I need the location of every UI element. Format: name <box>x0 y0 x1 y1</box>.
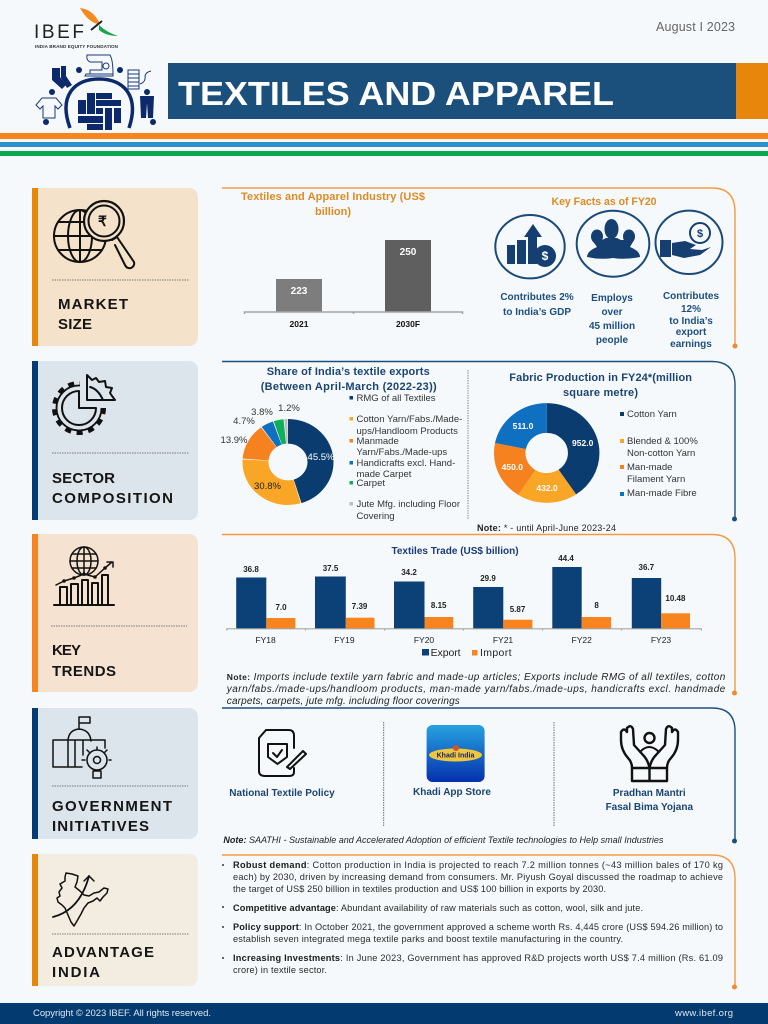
panel: government initiatives content <box>222 708 737 845</box>
chart heading: textile exports share: Share of India’s textile exports <box>267 366 430 378</box>
key fact: GDP contribution: Contributes 2% <box>500 292 574 303</box>
key fact: GDP contribution: $ <box>542 249 549 263</box>
donut labels: textile exports share: 3.8% <box>251 407 273 418</box>
panel: advantage india content <box>222 855 737 990</box>
donut labels: fabric production: 511.0 <box>513 421 534 431</box>
label: advantage india: INDIA <box>52 964 100 981</box>
label: advantage india <box>52 944 154 981</box>
legend: textile exports share: Handicrafts excl. Hand- <box>356 458 455 469</box>
bar chart: textiles trade: 29.9 <box>480 574 496 583</box>
dotted divider <box>51 625 187 627</box>
chart heading: textiles trade: Textiles Trade (US$ billion) <box>391 546 519 557</box>
key fact: GDP contribution <box>495 215 574 318</box>
label: pradhan mantri fasal bima yojana: Pradhan Mantri <box>613 788 686 799</box>
donut labels: fabric production: 952.0 <box>572 438 594 448</box>
IBEF logo: IBEF <box>34 22 84 43</box>
dotted divider <box>52 452 189 454</box>
legend: textile exports share <box>350 393 462 522</box>
icon: policy document <box>259 730 306 776</box>
legend: fabric production: Blended & 100% <box>627 436 698 447</box>
key fact: employment: over <box>601 307 623 318</box>
panel: market size card <box>32 188 198 346</box>
legend: textile exports share: Manmade <box>356 436 399 447</box>
icon: globe with magnifier <box>54 201 134 268</box>
dotted divider <box>52 785 188 787</box>
bullet: competitive advantage: Competitive advantage: Abundant availability of raw materials such as cotton, wool, silk and jute. <box>233 903 643 913</box>
bar chart: industry size: 2021 <box>290 319 309 329</box>
legend: export and import: Import <box>480 647 512 659</box>
dotted divider <box>52 279 189 281</box>
donut labels: textile exports share: 4.7% <box>233 416 255 427</box>
donut labels: textile exports share <box>221 403 335 492</box>
label: national textile policy: National Textile Policy <box>229 788 335 799</box>
key fact: employment: 45 million <box>589 321 635 332</box>
panel: sector composition content <box>221 362 737 533</box>
legend: textile exports share: Yarn/Fabs./Made-ups <box>356 447 447 458</box>
bar chart: textiles trade: FY19 <box>334 635 355 645</box>
bar chart: textiles trade: 36.8 <box>243 565 259 574</box>
bar chart: textiles trade: 8.15 <box>431 601 447 610</box>
icon: india map with arrow <box>53 873 108 926</box>
icon: khadi app tile <box>427 725 485 782</box>
dotted dividers <box>384 722 554 826</box>
bar chart: textiles trade: FY20 <box>414 635 434 645</box>
legend: textile exports share: Cotton Yarn/Fabs./Made- <box>356 414 462 425</box>
bullet: robust demand: each) by 2030, driven by increasing demand from consumers. Mr. Piyush Goyal discussed the roadmap to achieve <box>233 872 723 882</box>
label: government initiatives: INITIATIVES <box>52 818 149 835</box>
label: market size: MARKET <box>58 296 128 313</box>
label: pradhan mantri fasal bima yojana: Fasal Bima Yojana <box>606 802 693 813</box>
chart heading: textile exports share <box>261 366 437 393</box>
textile emblem icon <box>36 55 156 130</box>
legend: textile exports share: made Carpet <box>356 469 412 480</box>
bar chart: industry size: 223 <box>291 286 308 297</box>
note: fabric production: Note: * - until April-June 2023-24 <box>477 523 616 533</box>
key fact: export earnings: export <box>676 327 707 338</box>
icon: government building and bulb <box>53 717 111 778</box>
label: advantage india: ADVANTAGE <box>52 944 154 961</box>
donut labels: textile exports share: 45.5% <box>308 452 335 463</box>
panel: sector composition card <box>32 361 198 520</box>
legend: export and import: Export <box>431 647 461 659</box>
note: trade definitions: yarn/fabs./made-ups/handloom products, man-made yarn/fabs./made-ups, handicrafts excl. handmade <box>226 684 726 695</box>
bullet: increasing investments: crore) in textile sector. <box>233 965 327 975</box>
key fact: export earnings: $ <box>697 228 703 240</box>
donut labels: fabric production: 432.0 <box>536 483 558 493</box>
icon: globe with magnifier: ₹ <box>98 213 107 229</box>
key fact: employment: Employs <box>591 293 633 304</box>
bullet: policy support: Policy support: In October 2021, the government approved a scheme worth Rs. 4,445 crore (US$ 594.26 million) to <box>233 922 723 932</box>
label: pradhan mantri fasal bima yojana <box>606 788 693 813</box>
label: sector composition: COMPOSITION <box>52 490 173 507</box>
panel: government initiatives card <box>32 708 198 839</box>
bullet: robust demand: Robust demand: Cotton production in India is projected to reach 7.2 million tonnes (~43 million bales of 170 kg <box>233 860 723 870</box>
chart heading: industry size: billion) <box>315 206 351 218</box>
dotted divider <box>467 370 469 520</box>
bar chart: textiles trade: 34.2 <box>401 568 417 577</box>
legend: fabric production: Man-made Fibre <box>627 488 697 499</box>
heading: key facts: Key Facts as of FY20 <box>552 196 656 208</box>
donut labels: textile exports share: 13.9% <box>221 435 248 446</box>
bullet: robust demand <box>222 860 723 894</box>
note: trade definitions: carpets, carpets, jute mfg. including floor coverings <box>227 696 460 707</box>
icon: khadi app tile: Khadi India <box>437 752 474 760</box>
panel: key trends card <box>32 534 198 692</box>
label: sector composition <box>52 470 173 507</box>
bar chart: textiles trade: 7.0 <box>275 603 287 612</box>
bullet: increasing investments: Increasing Investments: In June 2023, Government has approved R&D projects worth US$ 7.4 million (Rs. 61.09 <box>233 953 723 963</box>
legend: fabric production: Man-made <box>627 462 672 473</box>
bullet: policy support <box>222 922 723 944</box>
donut labels: textile exports share: 30.8% <box>254 481 282 492</box>
date: August I 2023 <box>656 20 735 34</box>
footer: www.ibef.org <box>674 1008 733 1019</box>
footer <box>0 1003 768 1024</box>
key fact: export earnings: earnings <box>670 339 712 350</box>
label: government initiatives <box>52 798 172 835</box>
donut labels: textile exports share: 1.2% <box>278 403 300 414</box>
header tricolour stripes <box>0 133 768 156</box>
label: key trends <box>52 642 116 680</box>
panel: market size content <box>222 188 738 350</box>
bar chart: textiles trade: 7.39 <box>352 602 368 611</box>
key fact: export earnings: to India’s <box>669 316 713 327</box>
key fact: GDP contribution: to India’s GDP <box>503 307 571 318</box>
legend: fabric production: Filament Yarn <box>627 474 685 485</box>
bar chart: textiles trade: 44.4 <box>558 554 574 563</box>
label: key trends: KEY <box>52 642 81 659</box>
bar chart: textiles trade: 5.87 <box>510 605 526 614</box>
donut chart: fabric production <box>510 418 584 488</box>
key fact: export earnings <box>656 211 722 350</box>
key fact: employment <box>577 211 649 346</box>
bar chart: industry size <box>244 240 462 329</box>
bar chart: textiles trade: 37.5 <box>323 564 339 573</box>
label: key trends: TRENDS <box>52 663 116 680</box>
legend: textile exports share: RMG of all Textiles <box>356 393 436 404</box>
title banner: TEXTILES AND APPAREL <box>178 75 614 112</box>
bar chart: textiles trade <box>227 554 701 645</box>
bar chart: textiles trade: FY23 <box>651 635 671 645</box>
legend: textile exports share: ups/Handloom Products <box>356 426 458 437</box>
legend: textile exports share: Covering <box>356 511 395 522</box>
icon: protecting hands <box>621 726 678 781</box>
panel: key trends content <box>222 534 737 707</box>
chart heading: industry size: Textiles and Apparel Industry (US$ <box>241 191 425 203</box>
key fact: export earnings: 12% <box>681 304 701 315</box>
donut chart: textile exports share <box>256 431 320 493</box>
key fact: employment: people <box>596 335 629 346</box>
chart heading: fabric production: square metre) <box>563 387 638 399</box>
note: SAATHI: Note: SAATHI - Sustainable and Accelerated Adoption of efficient Textile technologies to Help small Industries <box>223 835 664 845</box>
bullet: increasing investments <box>222 953 723 975</box>
legend: export and import <box>422 647 512 659</box>
key fact: export earnings: Contributes <box>663 291 719 302</box>
bar chart: textiles trade: FY18 <box>255 635 276 645</box>
label: market size: SIZE <box>58 316 92 333</box>
label: market size <box>58 296 128 333</box>
bar chart: industry size: 250 <box>400 247 417 258</box>
bullet: robust demand: the target of US$ 250 billion in textiles production and US$ 100 billion in exports by 2030. <box>233 884 606 894</box>
chart heading: industry size <box>241 191 425 218</box>
bullet: policy support: establish seven integrated mega textile parks and boost textile manufacturing in the country. <box>233 934 623 944</box>
legend: fabric production: Cotton Yarn <box>627 409 677 420</box>
legend: textile exports share: Carpet <box>356 478 385 489</box>
note: trade definitions <box>226 672 726 707</box>
bar chart: textiles trade: FY21 <box>493 635 513 645</box>
bar chart: textiles trade: 8 <box>594 601 599 610</box>
IBEF logo <box>34 8 119 49</box>
bar chart: textiles trade: 36.7 <box>639 563 655 572</box>
icon: globe and growth bars <box>54 547 114 605</box>
label: sector composition: SECTOR <box>52 470 115 487</box>
bar chart: textiles trade: FY22 <box>572 635 592 645</box>
panel: advantage india card <box>32 854 198 986</box>
label: khadi app store: Khadi App Store <box>413 787 491 798</box>
chart heading: fabric production: Fabric Production in FY24*(million <box>509 372 692 384</box>
donut labels: fabric production <box>502 421 594 493</box>
bar chart: industry size: 2030F <box>396 319 420 329</box>
donut labels: fabric production: 450.0 <box>502 462 523 472</box>
footer: Copyright © 2023 IBEF. All rights reserved. <box>33 1008 211 1019</box>
chart heading: textile exports share: (Between April-March (2022-23)) <box>261 381 437 393</box>
chart heading: fabric production <box>509 372 692 399</box>
icon: gear with pie <box>54 372 118 432</box>
note: trade definitions: Note: Imports include textile yarn fabric and made-up articles; Exports include RMG of all textiles, cotton <box>227 672 726 683</box>
title banner <box>168 63 768 119</box>
dotted divider <box>52 933 189 935</box>
IBEF logo: INDIA BRAND EQUITY FOUNDATION <box>35 44 119 49</box>
label: government initiatives: GOVERNMENT <box>52 798 172 815</box>
legend: fabric production: Non-cotton Yarn <box>627 448 695 459</box>
legend: fabric production <box>620 409 698 499</box>
bar chart: textiles trade: 10.48 <box>665 594 686 603</box>
legend: textile exports share: Jute Mfg. including Floor <box>356 499 460 510</box>
